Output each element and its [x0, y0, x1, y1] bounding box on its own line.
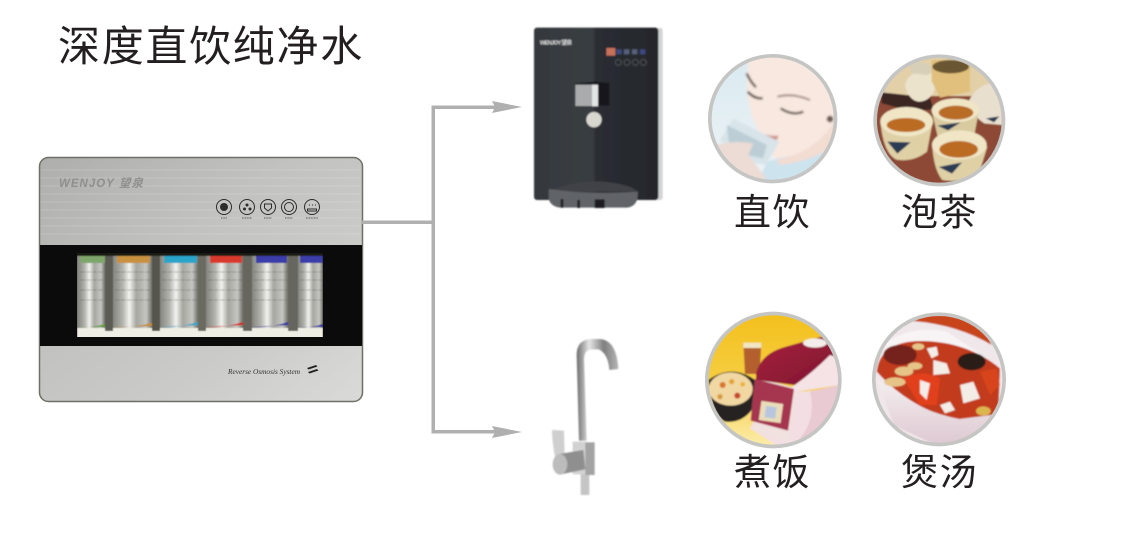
fingers [715, 142, 767, 182]
cup brush motifs [887, 116, 999, 174]
control panel [751, 379, 794, 431]
wall-mounted water dispenser [534, 28, 663, 208]
certification mark [307, 365, 318, 374]
photo: rice cooker [705, 312, 842, 452]
dispenser body [534, 28, 658, 200]
cups [932, 114, 978, 136]
neck [776, 122, 834, 166]
dispenser side edge [653, 28, 663, 200]
arrows: water routing [362, 101, 522, 438]
water purifier unit [40, 158, 362, 402]
label: tea: 泡茶 [901, 192, 978, 233]
system caption: Reverse Osmosis System [227, 367, 301, 376]
faucet base [573, 442, 595, 495]
white pot [969, 83, 1003, 125]
bowl rim [882, 330, 1001, 370]
drink glass [743, 343, 761, 374]
glass [720, 118, 779, 165]
photo: soup [872, 312, 1007, 449]
faucet spout [577, 339, 618, 441]
black window band [40, 245, 362, 346]
rice bowl [708, 372, 755, 422]
control icons [216, 200, 320, 218]
filter cartridges [78, 256, 323, 328]
drip tray [549, 181, 638, 208]
photo: tea cups [873, 54, 1007, 188]
soup [877, 341, 1000, 420]
photo: drinking water [707, 52, 840, 185]
cooker lid [756, 335, 838, 385]
bowl body [888, 406, 992, 442]
label: direct drinking: 直饮 [734, 192, 811, 233]
tea caddy [932, 60, 970, 98]
dark tray [882, 92, 933, 112]
casing sheen stripes [41, 170, 361, 234]
teapot [905, 72, 937, 102]
dispenser tap knob [586, 112, 602, 127]
soup ingredients [883, 345, 917, 365]
panel: purifier casing [40, 158, 362, 402]
cooker body [750, 390, 816, 444]
faucet lever [552, 430, 585, 475]
dispenser logo: WENJOY 望泉 [540, 39, 572, 47]
touch buttons [606, 48, 646, 65]
shirt [762, 152, 824, 180]
filter window [77, 253, 323, 338]
dispensing spout [575, 82, 609, 106]
kitchen faucet [552, 339, 618, 495]
label: soup: 煲汤 [901, 452, 978, 493]
face [747, 55, 838, 159]
cartridge label print [80, 272, 322, 300]
title: 深度直饮纯净水 [58, 23, 364, 70]
background dish [913, 315, 992, 345]
label: cooking rice: 煮饭 [734, 452, 811, 493]
brand logo: WENJOY 望泉 [59, 177, 144, 190]
